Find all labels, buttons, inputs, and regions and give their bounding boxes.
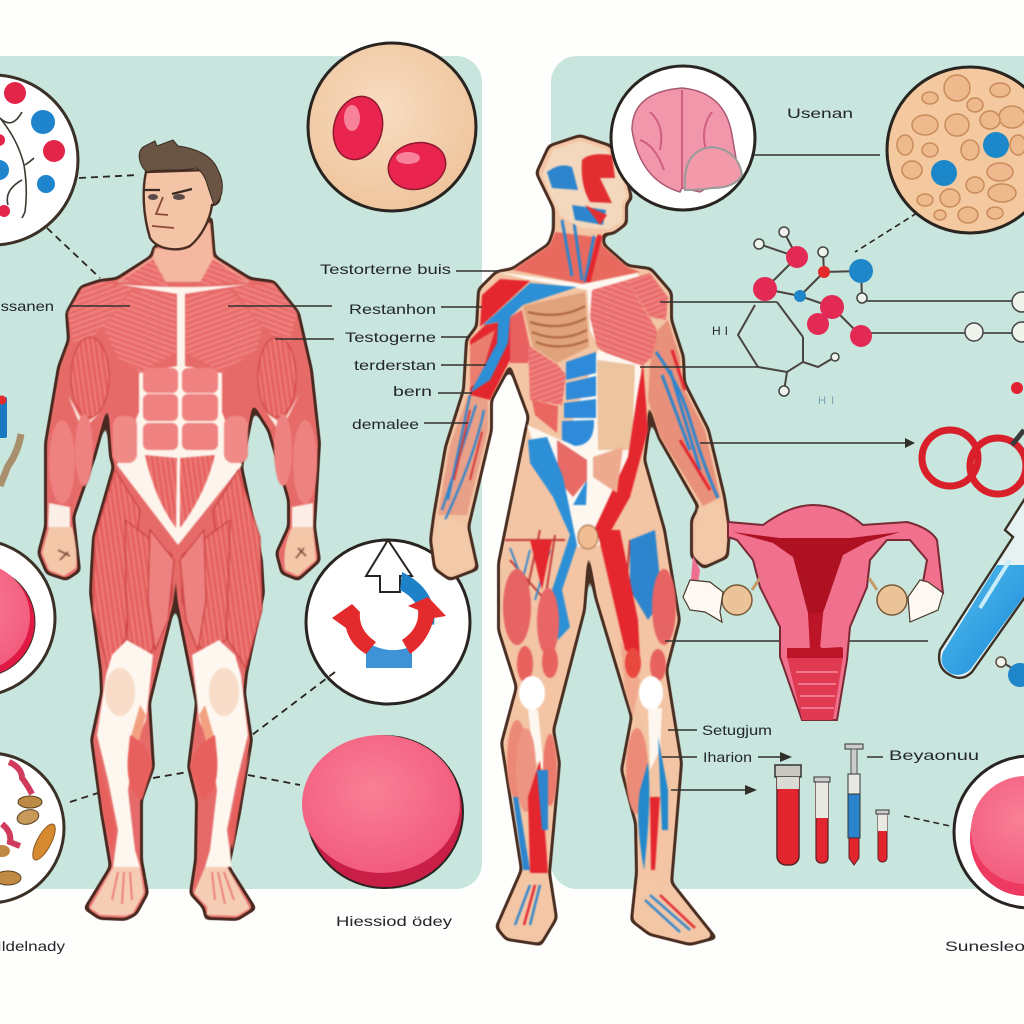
labels: terderstan <box>354 357 436 373</box>
labels: demalee <box>352 416 419 432</box>
labels: Beyaonuu <box>889 747 979 763</box>
elbow tendons <box>68 393 300 433</box>
dashed connector to circle <box>904 816 950 826</box>
molecule diagram <box>738 227 1024 396</box>
test tubes <box>775 744 889 865</box>
panel: left background <box>0 56 482 889</box>
neck and traps <box>117 222 250 282</box>
lower abs <box>557 440 587 497</box>
hands <box>434 502 726 575</box>
torso white backing <box>527 350 648 547</box>
right arm <box>648 320 720 506</box>
figure: anatomical side body <box>432 137 728 943</box>
forearm muscles <box>49 414 317 504</box>
left leg muscles <box>503 569 531 645</box>
groin vessels <box>505 530 640 600</box>
icon: linked rings <box>922 430 1024 494</box>
left forearm <box>438 395 488 515</box>
arrowheads <box>745 438 915 795</box>
body outline <box>432 137 728 943</box>
biceps <box>71 337 109 417</box>
dashed connector tissue <box>855 213 917 252</box>
abdominal tendon backing <box>117 284 250 545</box>
left shoulder <box>480 279 530 327</box>
wrists <box>48 503 313 527</box>
thigh muscles <box>93 470 262 668</box>
lateral muscles <box>508 310 530 363</box>
feet <box>501 872 709 940</box>
pelvis ball <box>578 525 598 549</box>
obliques <box>113 416 137 463</box>
circle: pink tissue left <box>0 540 55 696</box>
right lower leg <box>190 640 250 867</box>
labels: HI <box>712 324 728 338</box>
ribs <box>523 292 589 363</box>
blue band across chest <box>470 283 577 393</box>
right leg muscles <box>630 530 662 620</box>
red strip <box>594 363 648 545</box>
pecs <box>103 290 176 372</box>
abs <box>143 368 218 450</box>
body fill <box>40 220 318 918</box>
pink disc <box>302 735 463 888</box>
test tube: large blue <box>939 500 1024 687</box>
labels: Hiessiod ödey <box>336 913 452 929</box>
labels: Sunesleo <box>945 938 1024 954</box>
labels: Testorterne buis <box>320 261 451 277</box>
white collar <box>497 272 640 350</box>
labels: Iharion <box>703 749 752 765</box>
right pec <box>590 280 657 365</box>
body outline <box>40 220 318 918</box>
uterus diagram <box>683 505 943 720</box>
head skin and muscles <box>542 141 627 229</box>
circle: pink disc right <box>954 756 1024 908</box>
panel: right background <box>551 56 1024 889</box>
labels: Usenan <box>787 105 853 121</box>
tan abs <box>597 360 635 450</box>
hair <box>139 140 222 205</box>
circle: microbes bottom left <box>0 753 64 903</box>
head <box>144 170 220 249</box>
dashed connectors left <box>47 175 335 802</box>
body fill <box>432 137 728 943</box>
labels: HI <box>818 395 834 407</box>
label lines <box>70 155 1015 790</box>
icon: small vial left <box>0 396 21 486</box>
deltoids <box>68 282 132 345</box>
circle: cell tissue <box>887 67 1024 233</box>
labels: Testogerne <box>345 329 436 345</box>
circle: red cells <box>308 43 476 211</box>
face <box>145 189 192 194</box>
right deltoid <box>627 273 668 320</box>
lower abdominal muscles <box>145 455 215 528</box>
circle: brain <box>611 66 755 210</box>
blue hip <box>528 437 577 640</box>
hands <box>42 527 316 576</box>
circle: molecules top left <box>0 75 78 245</box>
left lower leg <box>95 640 153 867</box>
feet <box>90 867 250 916</box>
blue abs <box>562 352 596 446</box>
figure: front muscular body <box>40 140 318 918</box>
neck vessels and traps <box>513 232 640 284</box>
labels: bern <box>393 383 432 399</box>
labels: Setugjum <box>702 722 772 738</box>
circle: cycle arrows <box>306 540 470 704</box>
labels: Restanhon <box>349 301 436 317</box>
upper left arm <box>470 320 510 400</box>
